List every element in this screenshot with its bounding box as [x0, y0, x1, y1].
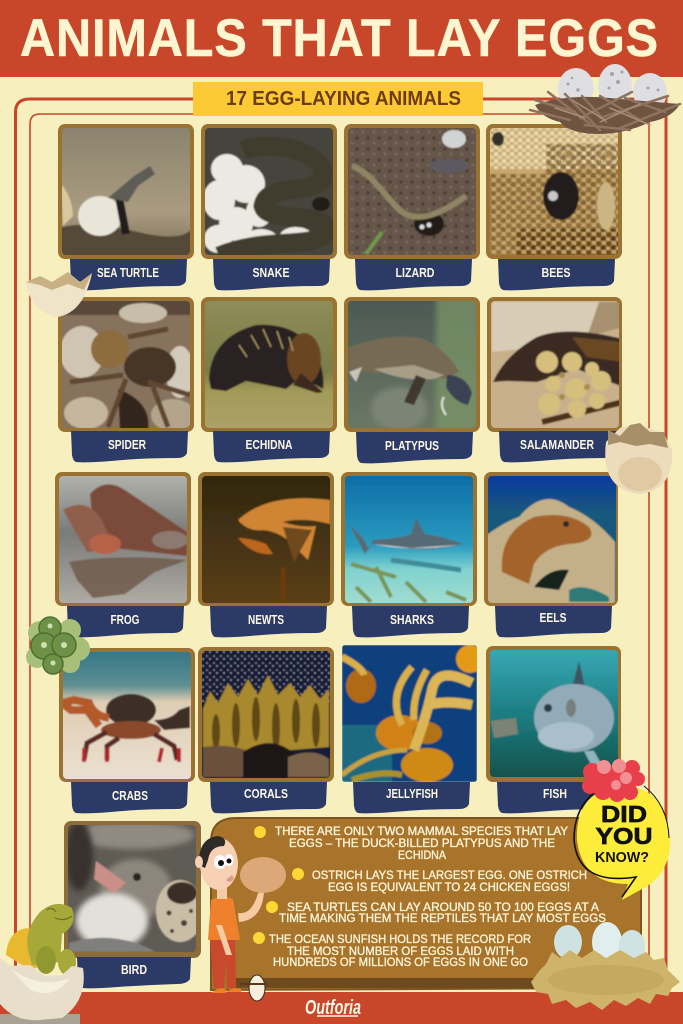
icon: cracked egg left — [26, 272, 92, 317]
character: person holding ostrich egg — [195, 836, 286, 993]
icon: cracked egg right — [605, 423, 672, 494]
icon: baby turtle hatching — [0, 904, 84, 1024]
title band — [0, 0, 683, 77]
card: crabs — [59, 648, 195, 813]
label: snake — [213, 259, 330, 290]
card: bees — [486, 124, 622, 290]
photo: newts — [202, 476, 330, 603]
label: echidna: ECHIDNA — [246, 437, 293, 452]
card: corals — [198, 647, 334, 813]
fact 1: THERE ARE ONLY TWO MAMMAL SPECIES THAT LAY — [275, 824, 568, 838]
photo: sea turtle — [62, 128, 190, 255]
photo: corals — [202, 651, 330, 778]
callout: did you know: YOU — [596, 823, 652, 849]
card: sharks — [341, 472, 477, 637]
label: sharks — [352, 606, 469, 637]
label: frog: FROG — [110, 612, 140, 627]
label: salamander: SALAMANDER — [520, 437, 594, 452]
fact 4: THE MOST NUMBER OF EGGS LAID WITH — [287, 944, 514, 958]
fact 2: EGG IS EQUIVALENT TO 24 CHICKEN EGGS! — [328, 880, 570, 894]
photo: fish — [490, 650, 618, 777]
label: newts — [210, 606, 327, 637]
photo: bird — [68, 825, 196, 952]
ostrich egg — [240, 857, 286, 893]
card: salamander — [487, 297, 623, 462]
fact 4: THE OCEAN SUNFISH HOLDS THE RECORD FOR — [269, 932, 531, 946]
label: platypus — [356, 432, 473, 463]
card: echidna — [201, 297, 337, 462]
icon: nest with speckled eggs — [530, 64, 680, 134]
label: spider — [71, 431, 188, 462]
photo: platypus — [348, 301, 476, 428]
photo: crabs — [63, 652, 191, 779]
label: snake: SNAKE — [252, 265, 290, 280]
fact 3 — [266, 900, 606, 925]
card: sea turtle — [58, 124, 194, 290]
fact 3: SEA TURTLES CAN LAY AROUND 50 TO 100 EGGS AT A — [287, 900, 599, 914]
icon: red fish eggs — [582, 759, 645, 802]
icon: green egg cluster — [26, 617, 90, 674]
fact 1: ECHIDNA — [398, 848, 446, 862]
label: crabs: CRABS — [112, 788, 148, 803]
label: eels: EELS — [540, 610, 567, 625]
label: bird: BIRD — [121, 962, 147, 977]
fact 4 — [253, 932, 531, 969]
fact 3: TIME MAKING THEM THE REPTILES THAT LAY MOST EGGS — [279, 911, 606, 925]
card: newts — [198, 472, 334, 637]
photo: lizard — [348, 128, 476, 255]
photo: eels — [488, 476, 616, 603]
label: jellyfish — [353, 782, 470, 813]
fact 2 — [292, 868, 587, 894]
label: fish: FISH — [543, 786, 567, 801]
callout: did you know: KNOW? — [595, 850, 649, 866]
card: frog — [55, 472, 191, 637]
label: corals: CORALS — [244, 786, 288, 801]
photo: frog — [59, 476, 187, 603]
label: bird — [77, 957, 191, 988]
logo: Outforia: Outforia — [305, 997, 361, 1019]
fact 2: OSTRICH LAYS THE LARGEST EGG. ONE OSTRICH — [312, 868, 587, 882]
card: eels — [484, 472, 620, 637]
card: snake — [201, 124, 337, 290]
label: fish — [497, 782, 614, 813]
label: salamander — [499, 431, 616, 462]
label: echidna — [213, 431, 330, 462]
footer band — [0, 992, 683, 1024]
label: frog — [67, 606, 184, 637]
icon: small cracked egg — [240, 975, 268, 1001]
photo: sharks — [345, 476, 473, 603]
label: newts: NEWTS — [248, 612, 284, 627]
panel: did you know facts — [211, 818, 641, 990]
fact 4: HUNDREDS OF MILLIONS OF EGGS IN ONE GO — [273, 955, 528, 969]
card: fish — [486, 646, 622, 813]
card: platypus — [344, 297, 480, 463]
card: lizard — [344, 124, 480, 290]
fact 1 — [254, 824, 568, 862]
photo: jellyfish — [342, 645, 484, 782]
icon: straw nest with blue eggs — [531, 922, 680, 1010]
banner: 17 egg-laying animals — [193, 82, 483, 116]
photo: snake — [205, 128, 333, 255]
label: jellyfish: JELLYFISH — [386, 786, 438, 801]
label: bees — [498, 259, 615, 290]
fact 1: EGGS – THE DUCK-BILLED PLATYPUS AND THE — [289, 836, 555, 850]
photo: salamander — [491, 301, 619, 428]
card: spider — [58, 297, 195, 462]
banner: 17 egg-laying animals: 17 EGG-LAYING ANIMALS — [226, 88, 461, 110]
label: platypus: PLATYPUS — [385, 438, 439, 453]
label: sea turtle: SEA TURTLE — [97, 265, 159, 280]
photo: bees — [490, 128, 618, 255]
label: spider: SPIDER — [108, 437, 146, 452]
label: sharks: SHARKS — [390, 612, 434, 627]
photo: echidna — [205, 301, 333, 428]
label: lizard: LIZARD — [396, 265, 434, 280]
photo: spider — [62, 301, 190, 428]
label: bees: BEES — [542, 265, 571, 280]
card: bird — [64, 821, 204, 988]
label: lizard — [355, 259, 472, 290]
callout: did you know: DID — [601, 801, 647, 827]
callout: did you know — [574, 786, 670, 900]
label: crabs — [71, 782, 188, 813]
label: corals — [210, 782, 327, 813]
label: eels — [495, 606, 612, 637]
label: sea turtle — [70, 259, 187, 290]
